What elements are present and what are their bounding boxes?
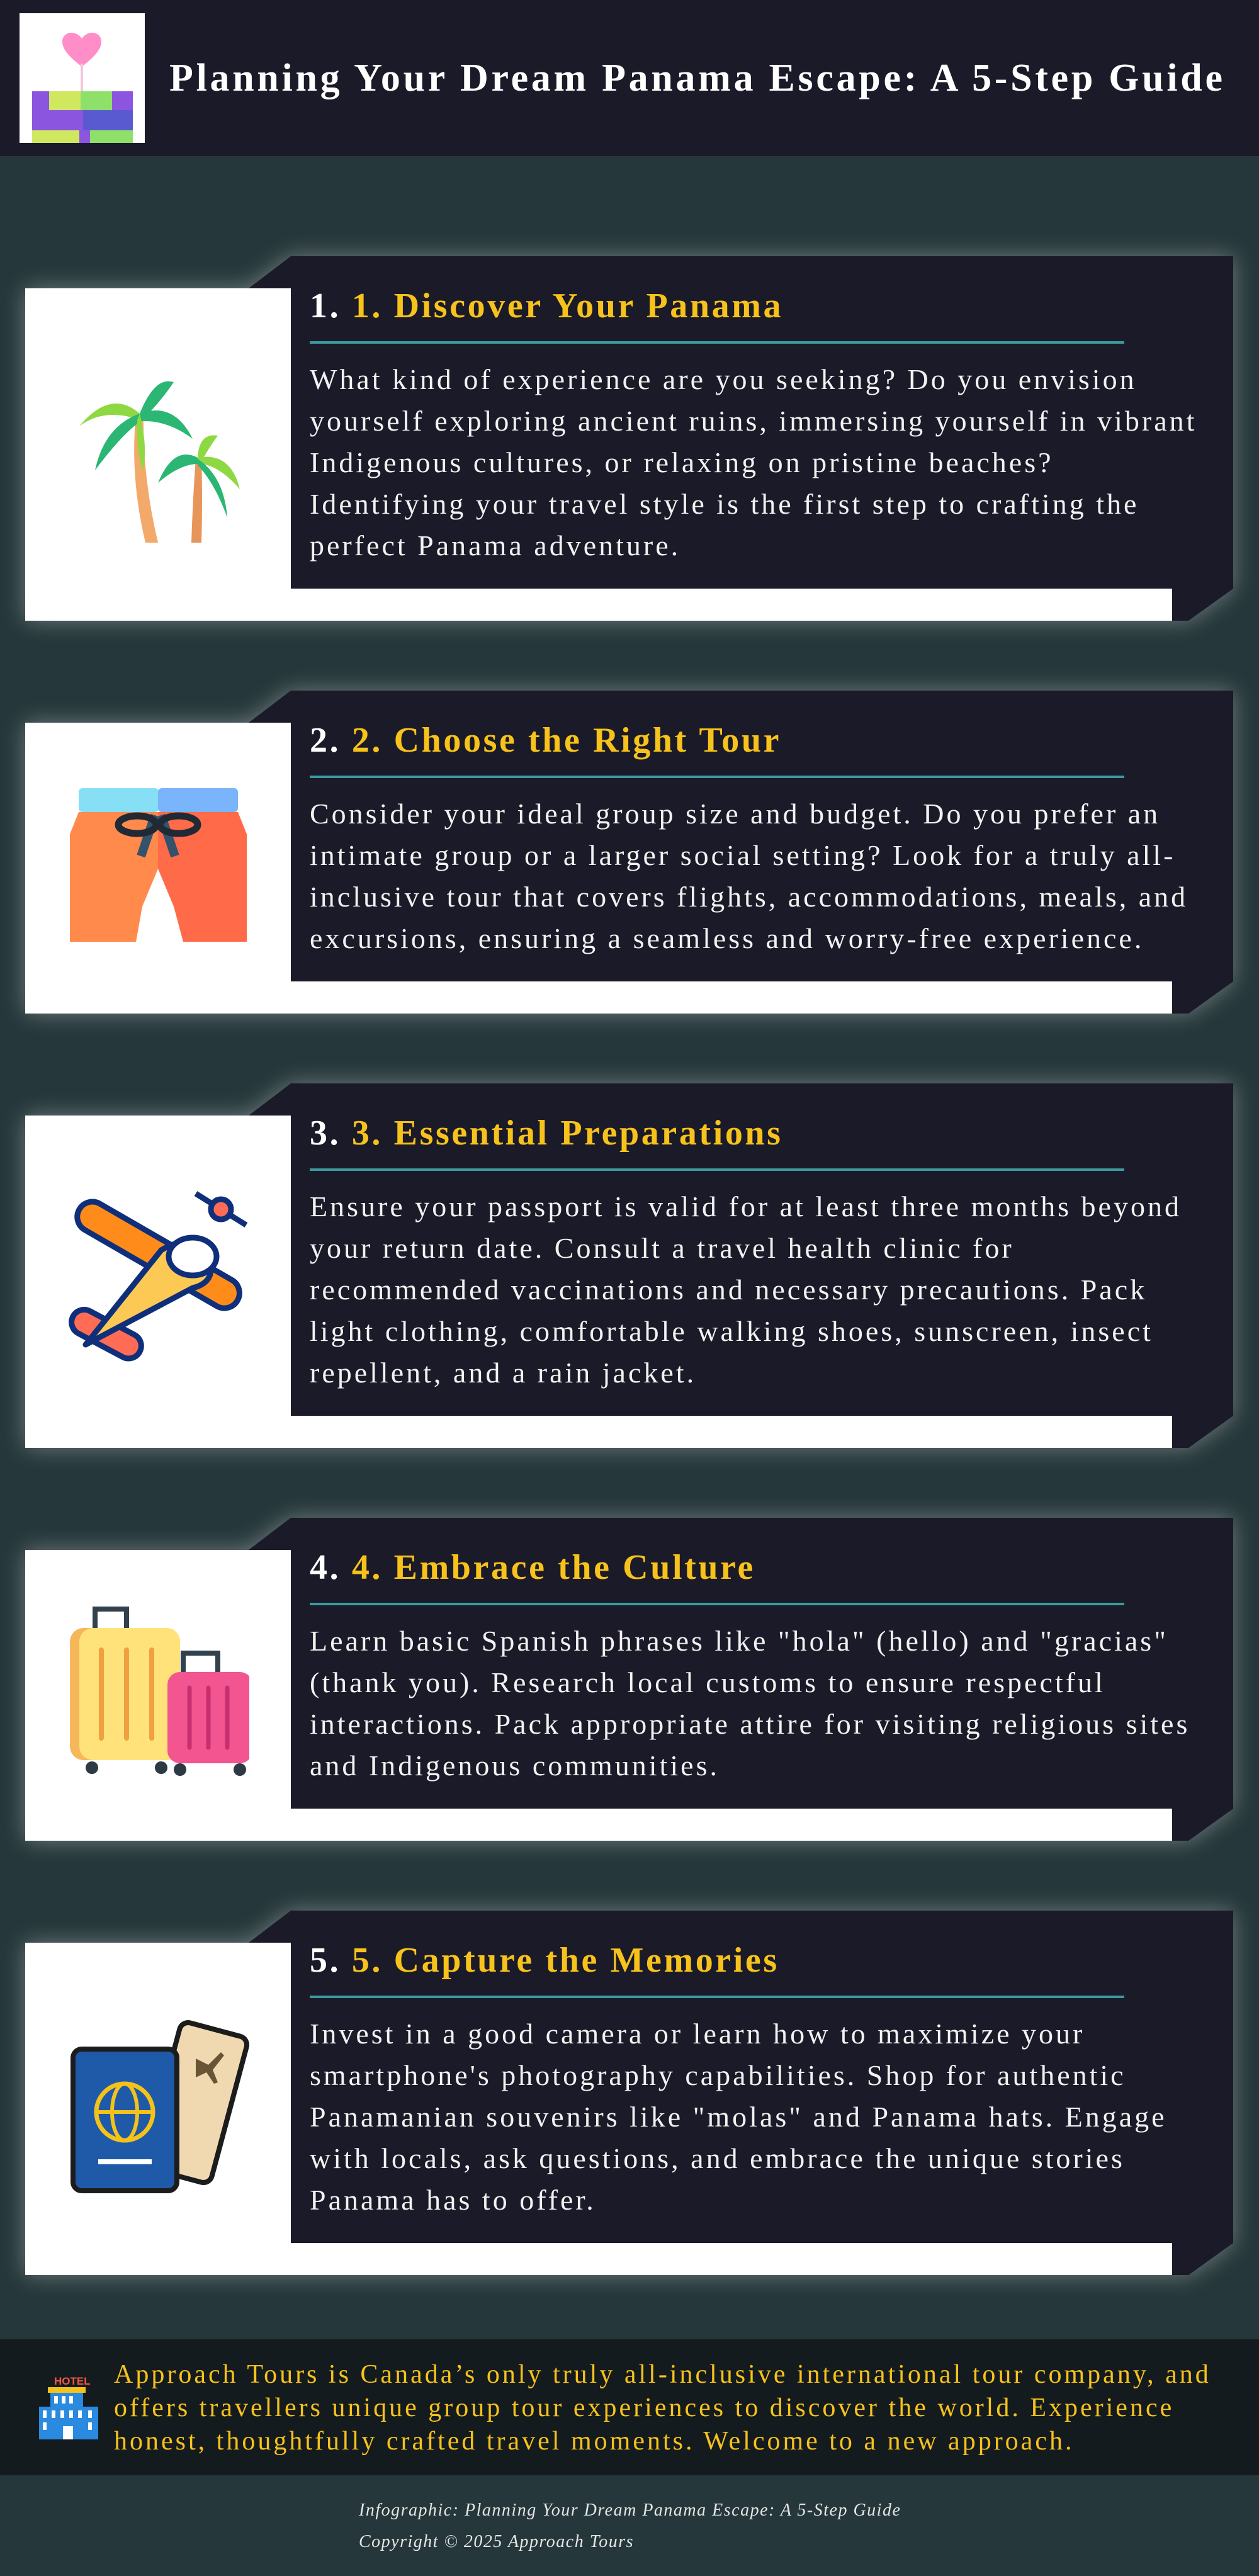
panel: step 2 [13,677,1246,1026]
footer: Copyright © 2025 Approach Tours [359,2532,634,2551]
text block: light clothing, comfortable walking shoes, sunscreen, insect [310,1315,1153,1347]
footer: Infographic: Planning Your Dream Panama Escape: A 5-Step Guide [359,2500,901,2520]
text block: Panamanian souvenirs like "molas" and Panama hats. Engage [310,2101,1167,2133]
text block [310,2018,1167,2216]
text block: Panama has to offer. [310,2184,596,2216]
title: Planning Your Dream Panama Escape: A 5-Step Guide [169,57,1226,99]
heading: 5. 5. Capture the Memories [310,1941,779,1980]
text block: company description: honest, thoughtfully crafted travel moments. Welcome to a new approach. [114,2427,1074,2456]
heading: 3. 3. Essential Preparations [310,1114,783,1153]
text block [310,1625,1190,1782]
heading: 4. 4. Embrace the Culture [310,1548,755,1587]
callout: company band [0,2339,1259,2475]
text block: Consider your ideal group size and budget. Do you prefer an [310,798,1160,830]
text block: inclusive tour that covers flights, accommodations, meals, and [310,881,1188,913]
text block: repellent, and a rain jacket. [310,1357,696,1389]
icon: luggage [70,1607,249,1776]
text block: yourself exploring ancient ruins, immersing yourself in vibrant [310,405,1197,437]
text block: What kind of experience are you seeking? Do you envision [310,363,1137,395]
panel: step 4 [13,1505,1246,1853]
icon: passport and ticket [71,2020,249,2193]
text block: perfect Panama adventure. [310,529,680,562]
text block: with locals, ask questions, and embrace the unique stories [310,2142,1125,2174]
text block: company description [114,2360,1211,2456]
text block [310,798,1188,954]
icon: airplane [69,1191,248,1361]
text block: Learn basic Spanish phrases like "hola" (hello) and "gracias" [310,1625,1168,1657]
text block: company description: Approach Tours is Canada’s only truly all-inclusive international tour company, and [114,2360,1211,2389]
header [0,0,1259,156]
icon: swim shorts [70,788,247,942]
panel: step 5 [13,1897,1246,2288]
text block [310,1190,1182,1389]
text block: (thank you). Research local customs to ensure respectful [310,1666,1105,1698]
text block: Invest in a good camera or learn how to maximize your [310,2018,1085,2050]
text block [310,363,1197,562]
icon: hotel: HOTEL [54,2375,91,2387]
text block: Identifying your travel style is the first step to crafting the [310,488,1139,520]
text block: excursions, ensuring a seamless and worry-free experience. [310,922,1144,954]
heading: 1. 1. Discover Your Panama [310,286,783,325]
icon: header puzzle heart [20,13,145,143]
text block: intimate group or a larger social setting? Look for a truly all- [310,839,1175,871]
text block: recommended vaccinations and necessary precautions. Pack [310,1274,1147,1306]
text block: your return date. Consult a travel health clinic for [310,1232,1014,1264]
panel: step 3 [13,1070,1246,1460]
text block: and Indigenous communities. [310,1749,720,1782]
icon: palm trees [79,381,240,543]
text block: Ensure your passport is valid for at least three months beyond [310,1190,1182,1223]
heading: 2. 2. Choose the Right Tour [310,721,781,760]
footer [359,2500,901,2551]
text block: smartphone's photography capabilities. Shop for authentic [310,2059,1126,2091]
text block: company description: offers travellers unique group tour experiences to discover the world. Experience [114,2393,1174,2422]
icon: hotel [39,2375,98,2439]
text block: interactions. Pack appropriate attire for visiting religious sites [310,1708,1190,1740]
panel: step 1 [13,243,1246,633]
text block: Indigenous cultures, or relaxing on pristine beaches? [310,446,1054,478]
